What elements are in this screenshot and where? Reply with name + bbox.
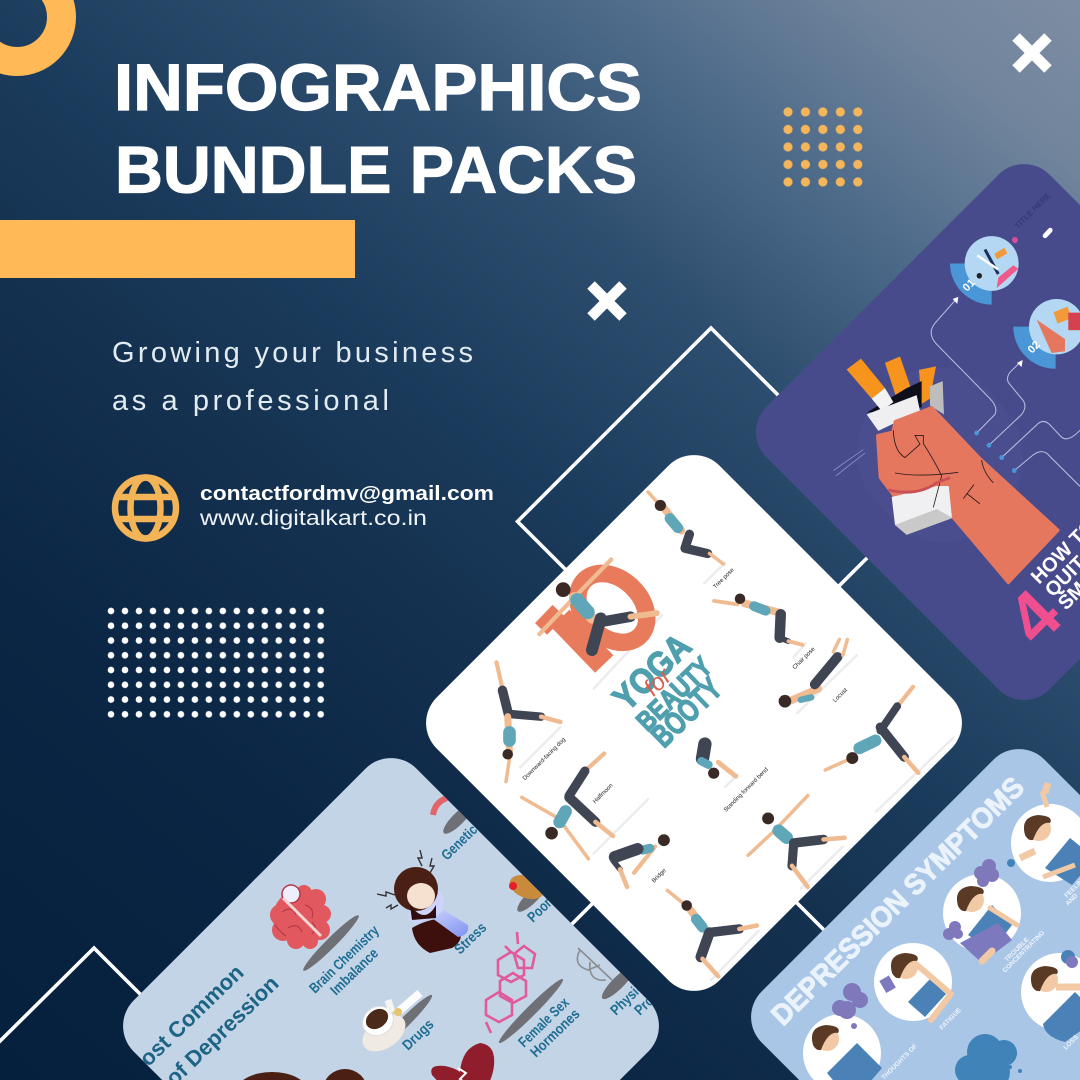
icon: rain cloud xyxy=(955,1034,1022,1080)
step numbers: 01 xyxy=(961,277,978,294)
cause labels xyxy=(308,826,652,1058)
person circle: fatigue xyxy=(874,943,952,1021)
pose: chair pose xyxy=(714,594,802,645)
title: BUNDLE PACKS xyxy=(115,132,637,206)
step numbers: 02 xyxy=(1026,339,1043,356)
contact details: www.digitalkart.co.in xyxy=(199,506,427,530)
icon: genetics arc xyxy=(433,798,447,815)
cause labels: Problems xyxy=(632,968,683,1019)
illustration: hormone molecule xyxy=(486,932,535,1033)
pose labels: Bridge xyxy=(651,868,668,884)
step numbers xyxy=(962,279,1040,353)
smoking card title xyxy=(1030,524,1080,609)
subtitle: Growing your business xyxy=(112,337,473,369)
pose labels xyxy=(522,567,849,884)
cause labels: Physical xyxy=(608,973,655,1019)
pose labels: Chair pose xyxy=(792,646,817,671)
yoga title: YOGA xyxy=(605,626,699,718)
thought clouds xyxy=(832,859,999,1029)
pose: tree pose xyxy=(648,492,724,564)
pose labels: Tree pose xyxy=(713,567,736,590)
icon: white cross top right xyxy=(1016,37,1048,69)
icon: brain xyxy=(270,885,331,949)
cause labels: Genetics xyxy=(439,818,486,864)
title xyxy=(114,50,642,206)
pose shadows xyxy=(520,562,953,980)
illustration: coffee and cigarette xyxy=(362,990,422,1052)
icon: glasses xyxy=(577,948,612,980)
cause labels: Stress xyxy=(452,920,490,958)
heading: Most Common xyxy=(121,960,248,1080)
symptom labels xyxy=(880,875,1080,1080)
heading: DEPRESSION SYMPTOMS xyxy=(766,771,1031,1032)
pose: downward-facing dog xyxy=(496,662,560,782)
decorative ring top left xyxy=(0,0,62,62)
yoga title script word: for xyxy=(638,662,678,702)
smoking card number four: 4 xyxy=(992,575,1077,660)
pose labels: Locust xyxy=(832,687,849,704)
contact details xyxy=(199,482,494,530)
illustration: dark hair at the lower edge xyxy=(236,1069,367,1080)
yoga title: BOOTY xyxy=(644,670,729,754)
illustration: stressed girl xyxy=(377,850,468,953)
pose: standing forward bend xyxy=(701,744,736,779)
illustration: broken heart xyxy=(431,1043,494,1080)
cause labels: Hormones xyxy=(528,1006,583,1061)
pose: halfmoon xyxy=(522,754,613,859)
cause labels: Drugs xyxy=(400,1017,437,1054)
person circle: trouble concentrating xyxy=(943,874,1021,963)
person circle: feeling xyxy=(1011,783,1080,885)
symptom labels: AND xyxy=(1064,892,1080,907)
numeral 10 xyxy=(541,560,660,664)
cause labels: Imbalance xyxy=(328,946,382,999)
pose labels: Downward-facing dog xyxy=(522,737,567,782)
pose: bridge xyxy=(613,834,670,887)
pose: three-legged dog xyxy=(825,687,918,773)
symptom labels: FATIGUE xyxy=(938,1006,963,1031)
cause labels: Female Sex xyxy=(516,995,573,1051)
symptom labels: LOSS xyxy=(1062,1033,1080,1051)
symptom labels: CONCENTRATING xyxy=(1001,929,1046,974)
pose: ten figure xyxy=(539,559,657,650)
icon: white cross centre xyxy=(591,285,623,317)
person circle: loss of interest xyxy=(803,1014,882,1080)
pose: warrior reverse xyxy=(748,796,845,887)
pose labels: Halfmoon xyxy=(592,783,615,805)
subtitle xyxy=(112,337,473,417)
small circle blue accent xyxy=(1007,859,1015,867)
pose: locust xyxy=(779,639,847,708)
subtitle: as a professional xyxy=(112,385,389,417)
panel: depression symptoms card xyxy=(736,734,1080,1080)
smoking card small heading: TITLE HERE xyxy=(1013,191,1053,230)
contact details: contactfordmv@gmail.com xyxy=(200,482,494,505)
person circle: loss of energy xyxy=(1021,950,1080,1042)
title: INFOGRAPHICS xyxy=(114,50,642,124)
symptom labels: TROUBLE xyxy=(1003,936,1031,963)
panel: smoking infographic card xyxy=(741,149,1080,715)
panel: yoga card xyxy=(411,440,977,1006)
shadows xyxy=(303,810,628,1043)
pose labels: Standing forward bend xyxy=(723,767,770,814)
panel: causes of depression card xyxy=(123,758,659,1080)
outline diamonds xyxy=(0,328,904,1047)
icon: globe xyxy=(115,478,176,538)
orange dot grid xyxy=(779,103,867,191)
icon: food xyxy=(509,875,543,899)
white dot grid xyxy=(104,604,328,722)
cause labels: Poor Nutrition xyxy=(525,859,593,926)
yoga title: BEAUTY xyxy=(630,651,718,737)
yoga title xyxy=(605,626,729,754)
yoga artwork xyxy=(496,492,953,980)
cause labels: Brain Chemistry xyxy=(307,923,383,997)
pose: crescent lunge xyxy=(667,890,757,976)
orange accent bar xyxy=(0,220,355,278)
smoking card artwork xyxy=(829,227,1080,583)
